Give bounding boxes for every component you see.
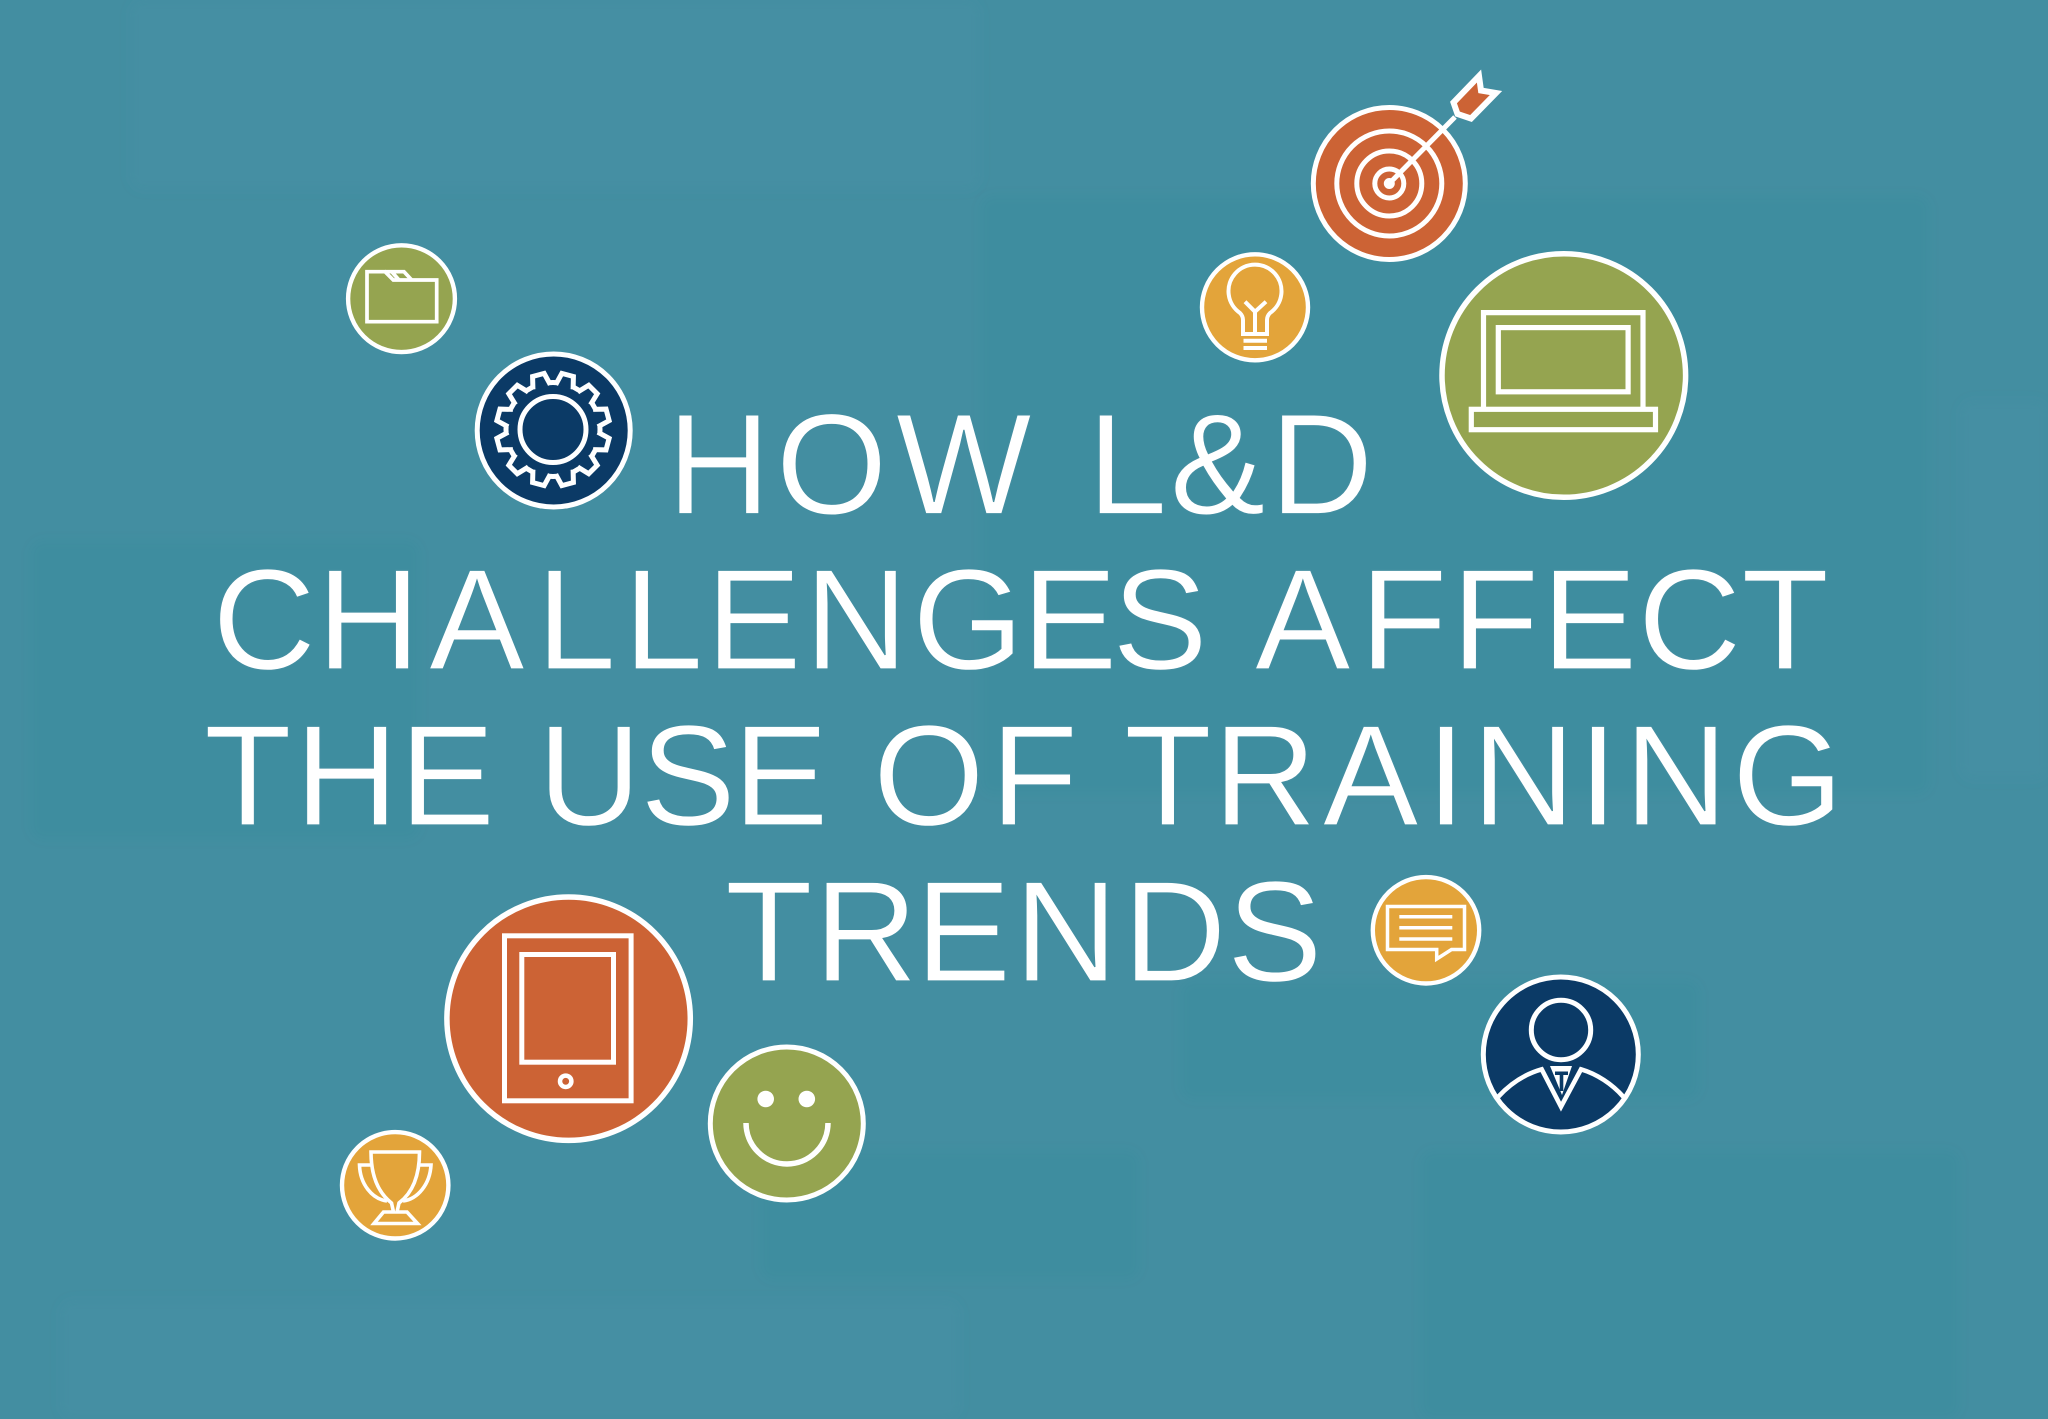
title: HOW <box>667 385 1031 545</box>
icon: light bulb <box>1202 254 1308 360</box>
title: THE <box>204 696 495 856</box>
title: AFFECT <box>1255 540 1829 700</box>
title: TRAINING <box>1124 696 1844 856</box>
icon: target with arrow <box>1313 76 1496 260</box>
icon: laptop <box>1442 254 1686 497</box>
icon: chat bubble <box>1373 877 1479 984</box>
title: CHALLENGES <box>212 540 1208 700</box>
icon: trophy <box>342 1132 448 1239</box>
title: L&D <box>1087 385 1373 545</box>
title: OF <box>873 696 1078 856</box>
icon: gear <box>477 354 630 507</box>
icon: smiley <box>710 1047 863 1200</box>
icon: person with tie <box>1483 977 1638 1132</box>
icon: tablet <box>447 897 690 1140</box>
title: TRENDS <box>725 852 1323 1012</box>
title <box>204 385 1844 1012</box>
title: USE <box>538 696 829 856</box>
icon: folder <box>348 245 455 352</box>
